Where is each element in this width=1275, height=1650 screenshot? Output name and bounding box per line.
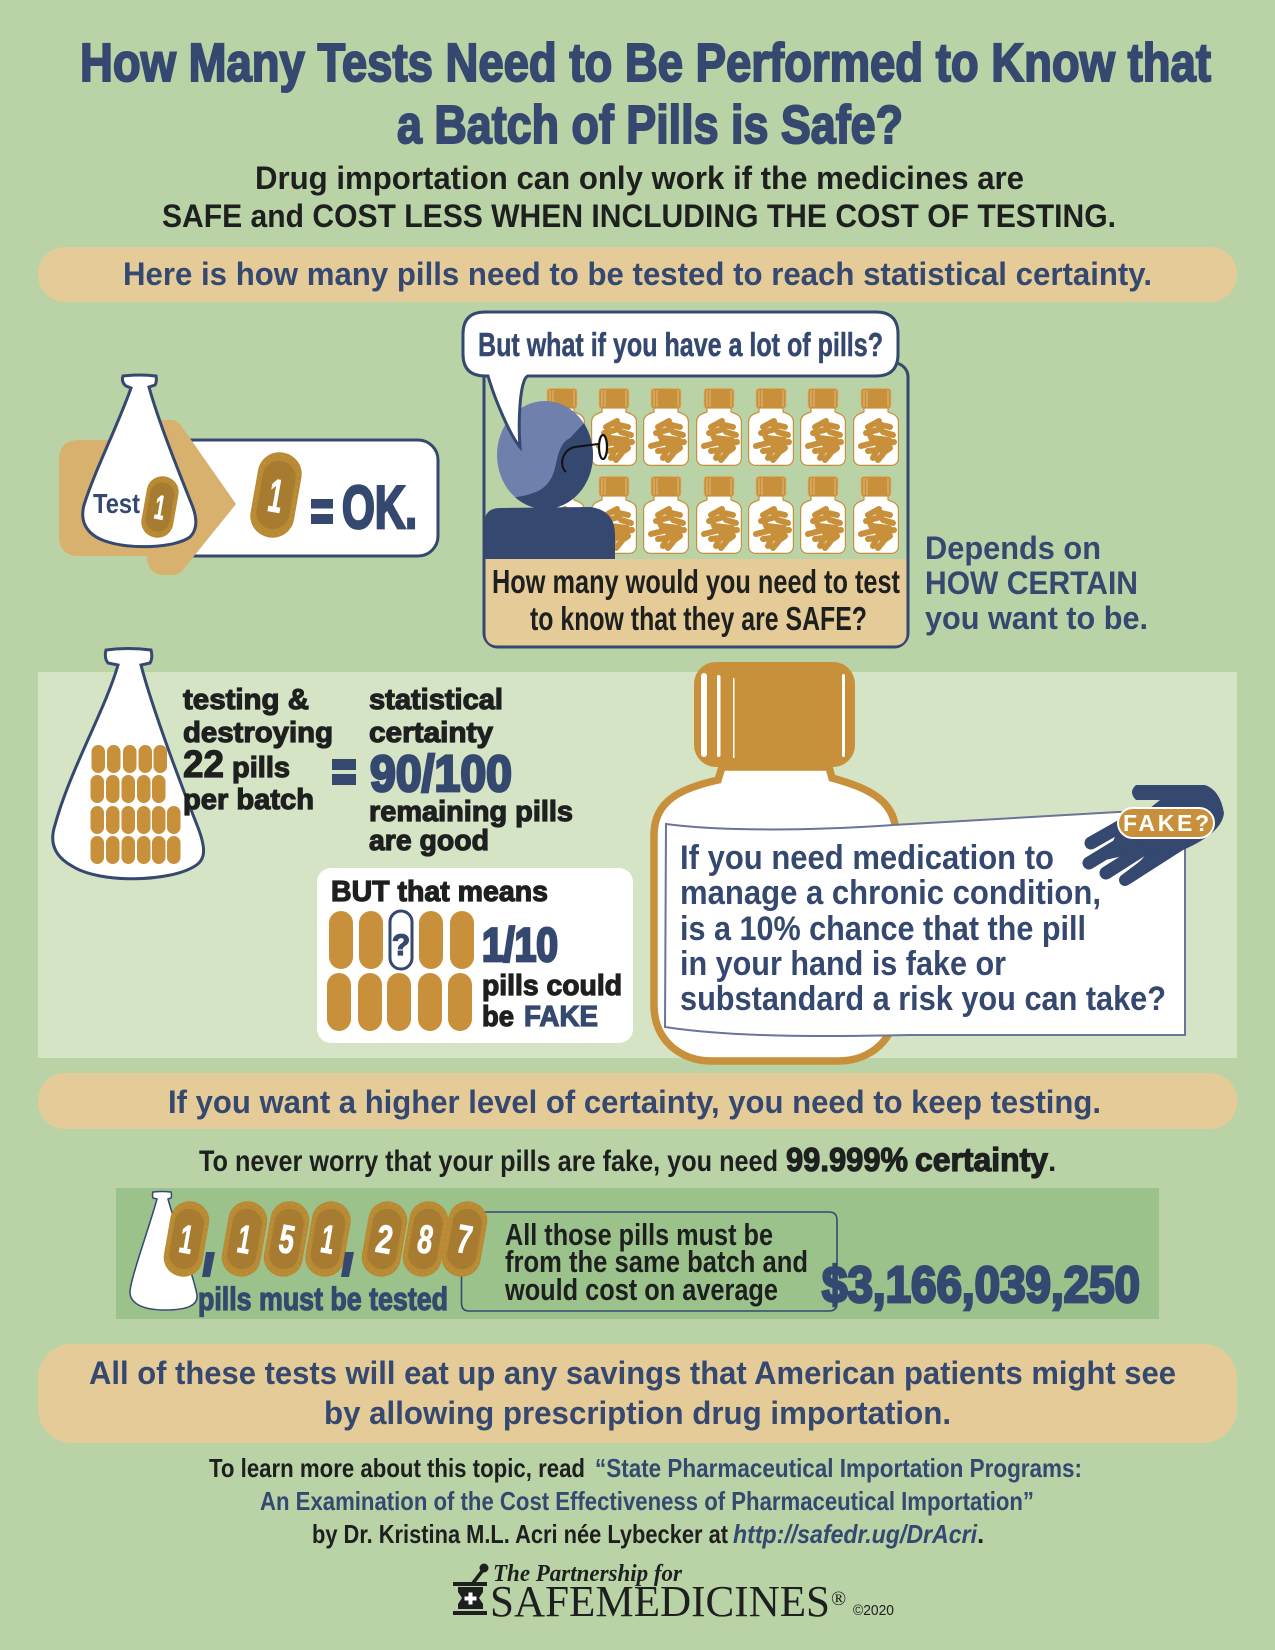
panel: test one pill [59,375,438,575]
strip: pills count and cost [116,1188,1159,1319]
label: chronic condition question: in your hand is fake or [680,945,1006,983]
speech bubble: But what if you have a lot of pills? [478,326,883,363]
icon: flask [130,1192,197,1310]
banner: conclusion: by allowing prescription drug importation. [324,1395,951,1431]
footer: source reference: “State Pharmaceutical Importation Programs: [595,1453,1082,1483]
subtitle [162,160,1116,234]
logo: Partnership for Safe Medicines [453,1561,894,1626]
text: testing and destroying 22 pills: per batch [183,784,314,816]
icon: flask with test pill [83,375,196,547]
label: chronic condition question [665,810,1185,1036]
footer: source reference: http://safedr.ug/DrAcri [733,1519,978,1549]
fake pill badge: FAKE? [1123,810,1209,836]
subtitle: Drug importation can only work if the medicines are [255,160,1024,196]
text: statistical certainty 90/100: 90/100 [370,745,512,802]
banner: conclusion: All of these tests will eat up any savings that American patients might see [89,1355,1176,1391]
label: chronic condition question: is a 10% chance that the pill [680,910,1086,948]
equals sign [332,759,356,785]
icon: pill [247,449,305,541]
commas [202,1252,354,1277]
callout: one in ten could be fake: 1/10 [482,918,558,971]
subtitle: SAFE and COST LESS WHEN INCLUDING THE COST OF TESTING. [162,198,1116,234]
text: statistical certainty 90/100: statistical [369,684,503,716]
icon: pill: 1 [264,468,287,523]
panel: ninety percent certainty [38,672,1237,1058]
pills grid [327,911,474,1031]
text: statistical certainty 90/100 [369,684,573,857]
text: never worry: 99.999% [786,1141,908,1178]
banner: higher level of certainty [38,1073,1237,1129]
text: testing and destroying 22 pills: destroying [183,717,333,749]
callout: one in ten could be fake: BUT that means [331,876,548,908]
title: a Batch of Pills is Safe? [397,95,903,155]
cost box: from the same batch and [505,1244,808,1279]
pill numbers: 7 [453,1217,476,1263]
footer: source reference: by Dr. Kristina M.L. Acri née Lybecker at [312,1519,728,1549]
text: never worry: . [1048,1145,1056,1178]
banner: statistical certainty [38,247,1237,302]
text: testing and destroying 22 pills: 22 [183,744,224,786]
text: depends on how certain: you want to be. [925,600,1148,636]
label: chronic condition question: If you need medication to [680,839,1054,877]
cost figure: $3,166,039,250 [822,1256,1140,1313]
icon: flask with test pill: 1 [152,488,168,528]
pill numbers: 1 [176,1217,197,1263]
logo: Partnership for Safe Medicines: ® [831,1588,846,1610]
unknown pill [390,911,412,969]
callout: one in ten could be fake: be [482,1001,514,1033]
text: never worry: certainty [915,1141,1049,1178]
callout: one in ten could be fake [317,868,633,1043]
equals OK text [311,474,417,541]
label: chronic condition question: substandard a risk you can take? [680,980,1166,1018]
text: statistical certainty 90/100: certainty [369,717,493,749]
pill numbers: 1 [318,1217,338,1263]
callout: one in ten could be fake: FAKE [524,1001,598,1033]
person [480,401,615,560]
question caption: to know that they are SAFE? [530,600,867,637]
cost box: All those pills must be [505,1217,773,1252]
cost box: would cost on average [504,1272,778,1307]
arrow [59,420,236,575]
bottles [540,388,898,553]
callout: one in ten could be fake: pills could [482,970,622,1002]
panel: what if you have a lot of pills [463,312,908,647]
pill numbers: 2 [373,1217,396,1263]
icon: hand holding fake pill [1089,785,1224,884]
pill numbers: 5 [276,1217,298,1263]
text: depends on how certain [925,530,1148,636]
text: depends on how certain: Depends on [925,530,1101,566]
icon: mortar and pestle [453,1564,488,1615]
caption: pills must be tested [198,1281,448,1317]
pill numbers: 1 [234,1217,255,1263]
logo: Partnership for Safe Medicines: SAFEMEDICINES [490,1577,830,1626]
unknown pill: ? [392,929,410,962]
text: never worry: To never worry that your pills are fake, you need [199,1145,778,1178]
frame [484,363,908,647]
text: depends on how certain: HOW CERTAIN [925,565,1138,601]
icon: large bottle [654,662,896,1061]
question caption [486,559,906,646]
icon: flask with test pill: Test [93,488,140,519]
white result box [170,440,438,556]
banner: statistical certainty: Here is how many pills need to be tested to reach statistical certainty. [123,256,1152,292]
logo: Partnership for Safe Medicines: ©2020 [853,1602,894,1619]
footer: source reference: To learn more about this topic, read [209,1453,585,1483]
icon: flask with 22 pills [53,648,204,879]
text: statistical certainty 90/100: remaining pills [369,796,573,828]
text: testing and destroying 22 pills: pills [232,752,290,784]
banner: higher level of certainty: If you want a higher level of certainty, you need to keep testing. [168,1084,1101,1120]
cost box [462,1212,837,1311]
label: chronic condition question: manage a chronic condition, [680,874,1101,912]
footer: source reference: . [977,1519,984,1549]
banner: conclusion [38,1344,1237,1443]
text: testing and destroying 22 pills: testing & [183,684,309,716]
logo: Partnership for Safe Medicines: The Partnership for [493,1561,683,1587]
question caption: How many would you need to test [492,563,900,600]
footer: source reference [209,1453,1082,1549]
footer: source reference: An Examination of the Cost Effectiveness of Pharmaceutical Importation” [260,1486,1034,1516]
equals OK text: OK. [342,474,417,541]
text: statistical certainty 90/100: are good [369,825,489,857]
pill numbers [161,1198,490,1280]
speech bubble [463,312,898,447]
text: testing and destroying 22 pills [183,684,333,816]
title [80,33,1211,155]
pill numbers: 8 [414,1217,437,1263]
